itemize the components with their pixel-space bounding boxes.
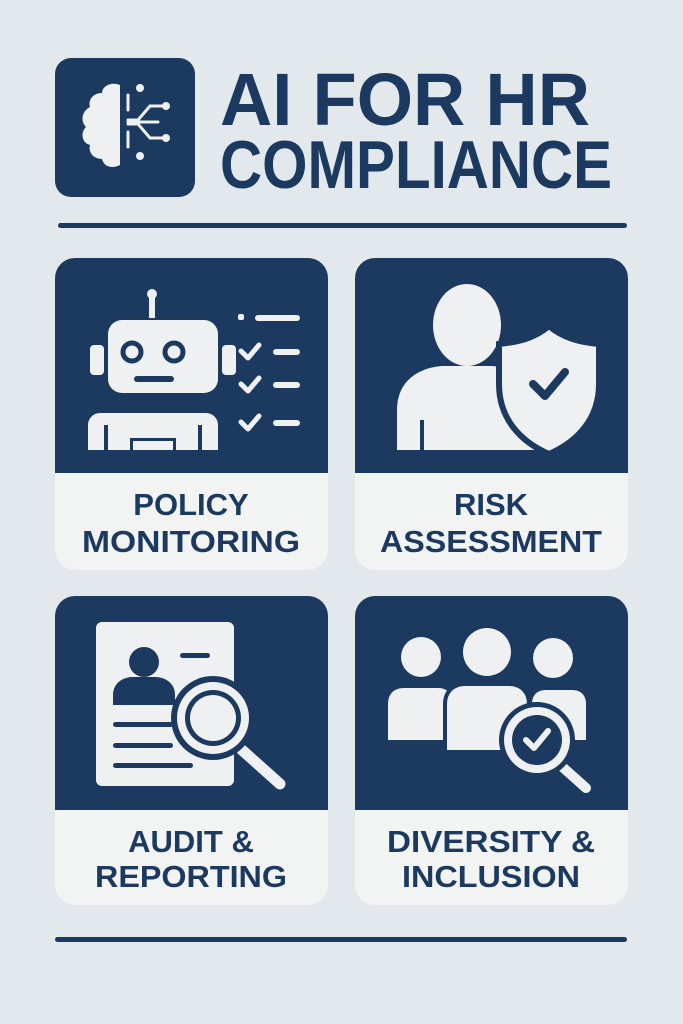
- icon: group with magnifier: [388, 628, 588, 788]
- logo: AI brain: [55, 58, 195, 197]
- panel: risk assessment: [355, 258, 628, 570]
- panel: diversity & inclusion: [355, 596, 628, 905]
- panel: diversity & inclusion: INCLUSION: [402, 859, 580, 894]
- icon: document with magnifier: [96, 622, 280, 786]
- panel: audit & reporting: REPORTING: [95, 859, 287, 894]
- panel: policy monitoring: [55, 258, 328, 570]
- title: AI FOR HR: [220, 58, 590, 141]
- label: DIVERSITY &: [387, 824, 595, 859]
- panel: risk assessment: ASSESSMENT: [380, 524, 602, 559]
- label: POLICY: [133, 487, 249, 522]
- panel: audit & reporting: [55, 596, 328, 905]
- icon: robot with checklist: [88, 289, 300, 450]
- panel: policy monitoring: MONITORING: [82, 524, 300, 559]
- label: RISK: [454, 487, 529, 522]
- label: AUDIT &: [128, 824, 254, 859]
- icon: person with shield: [397, 284, 599, 454]
- title: [220, 58, 612, 203]
- title: COMPLIANCE: [220, 127, 612, 203]
